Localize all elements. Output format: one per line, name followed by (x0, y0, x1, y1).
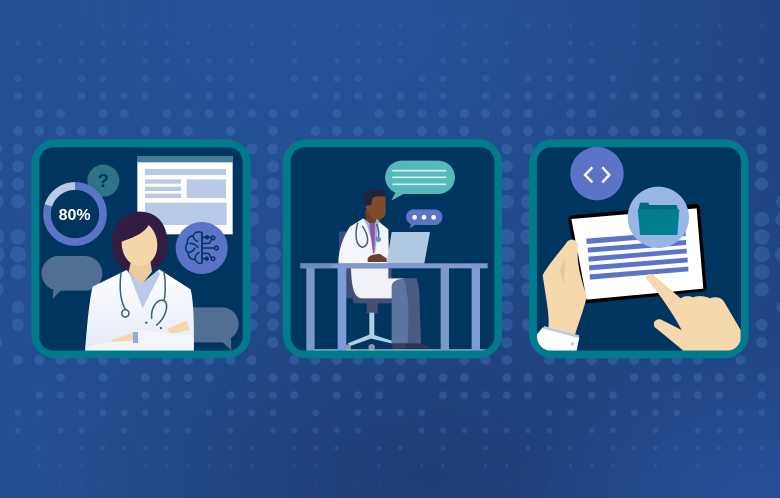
panel: hands using tablet (529, 139, 749, 358)
speech bubble with dots (406, 209, 442, 228)
donut chart 80% (40, 179, 110, 249)
speech bubble left (42, 256, 102, 299)
panel: doctor at desk with laptop (283, 139, 502, 358)
left hand and cuff (535, 240, 587, 351)
right hand pointing (646, 274, 741, 351)
icon: brain circuit (176, 222, 228, 274)
donut chart 80%: 80% (59, 207, 91, 224)
panel: doctor with data and AI icons (31, 139, 251, 358)
icon: question mark: ? (98, 170, 109, 191)
figure: doctor seated at desk (300, 189, 488, 351)
icon: folder (628, 187, 689, 248)
icon: code brackets (570, 147, 624, 200)
figure: doctor with crossed arms (85, 212, 194, 351)
dot pattern: middle band (0, 143, 780, 348)
icon: question mark (87, 165, 119, 197)
dashboard window (137, 156, 233, 234)
speech bubble right (187, 307, 239, 350)
speech bubble with lines (385, 161, 455, 201)
tablet with text lines (571, 208, 703, 300)
